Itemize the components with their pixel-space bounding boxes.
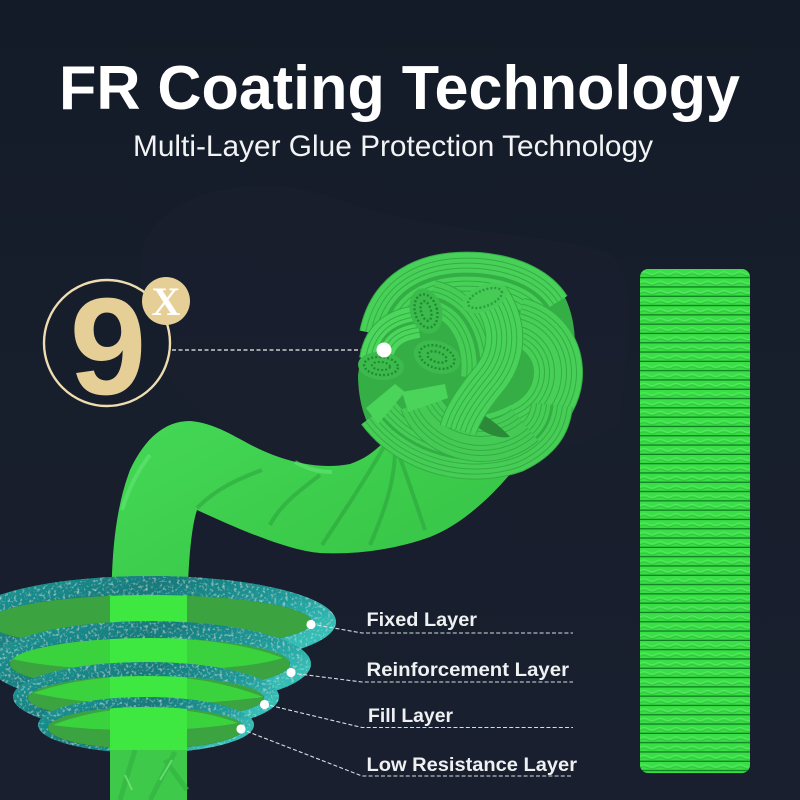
strand cut end: lower pair [366, 384, 448, 424]
strand cut end: centre [409, 334, 465, 380]
strand: right arc [470, 322, 558, 440]
background silhouette [140, 186, 629, 473]
callout dot on strand [376, 342, 392, 358]
ring 3: fill layer [13, 662, 279, 732]
strand: left [376, 322, 418, 360]
9x badge [44, 270, 190, 424]
layer labels [366, 610, 578, 776]
straight coated cord sample [640, 269, 750, 773]
dot: low resistance layer [236, 724, 246, 734]
label: low resistance layer: Low Resistance Layer [366, 755, 578, 776]
strand: lower inner arc [420, 402, 525, 441]
title: FR Coating Technology [59, 54, 740, 123]
ring 4: low resistance layer [38, 697, 254, 753]
dot: reinforcement layer [286, 668, 296, 677]
x circle [142, 277, 190, 325]
strand: centre [432, 298, 479, 378]
rope body [111, 421, 520, 640]
strand cut end: upper right [458, 277, 512, 319]
leader: low resistance layer [241, 729, 573, 776]
label: fill layer: Fill Layer [368, 706, 454, 727]
leader: reinforcement layer [291, 673, 573, 682]
hollow shadow between strands [452, 400, 510, 437]
strand: top arc [382, 275, 548, 335]
dot: fixed layer [306, 620, 316, 629]
green rope [111, 421, 520, 640]
label: reinforcement layer: Reinforcement Layer [366, 660, 570, 681]
rope cut-end ball of strands [357, 255, 575, 472]
glowing rope column inside cone [110, 595, 187, 750]
ring 2: reinforcement layer [0, 621, 311, 707]
lower rope below the cone [110, 750, 187, 800]
x letter: X [152, 279, 181, 324]
leader dots [236, 620, 316, 734]
strand cut end: left [357, 350, 405, 382]
big number 9: 9 [70, 270, 146, 424]
leader: fill layer [264, 704, 573, 728]
layered cone [0, 576, 336, 800]
ring 1 top arc over rope [0, 576, 336, 622]
label: fixed layer: Fixed Layer [366, 610, 478, 631]
rope highlights [122, 455, 332, 510]
ring 2 top arc over column [7, 621, 311, 662]
ball base [358, 255, 575, 472]
strand: upper right [458, 296, 504, 430]
rope twist shading [197, 445, 425, 545]
dot: fill layer [260, 700, 269, 709]
subtitle: Multi-Layer Glue Protection Technology [133, 130, 653, 163]
leader: fixed layer [311, 624, 573, 633]
ring 3 top arc over column [13, 662, 279, 696]
strand: bottom arc [378, 405, 552, 459]
leader lines [241, 624, 573, 776]
dashed connector from badge to rope [172, 349, 375, 351]
ring 4 top arc over column [38, 697, 254, 726]
strand cut end: upper centre [405, 285, 447, 337]
badge ring [44, 280, 170, 406]
ring 1: fixed layer [0, 576, 336, 668]
